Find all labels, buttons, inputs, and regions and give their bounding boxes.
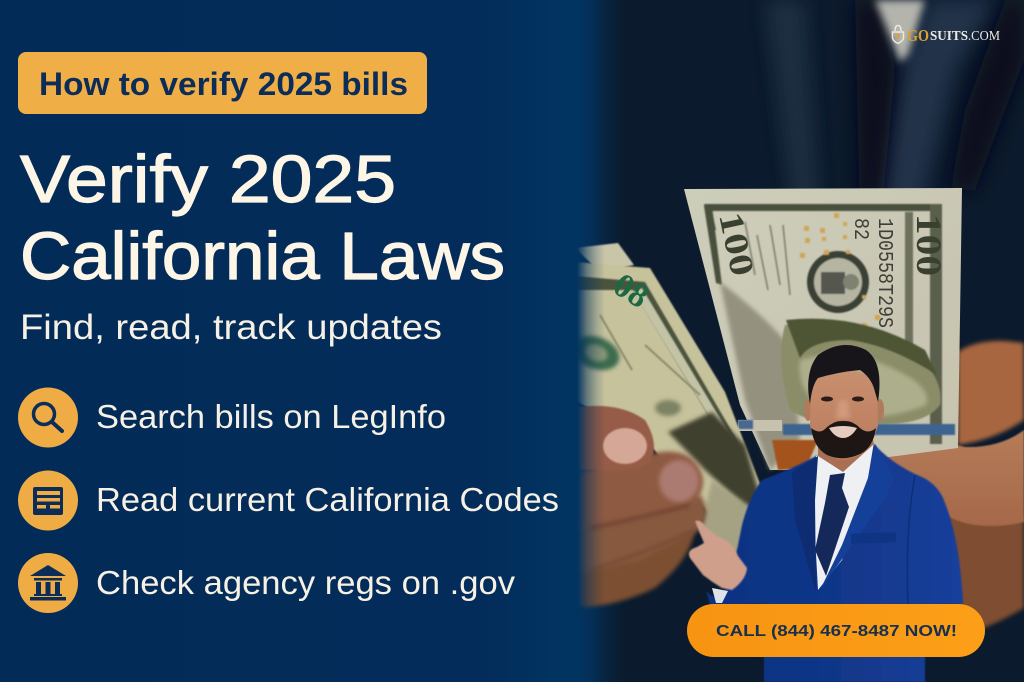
subtitle: Find, read, track updates [20,308,442,347]
left navy panel background [0,0,600,682]
ears [804,399,812,421]
left bill green numerals: 08 [607,266,655,316]
tie [815,473,849,576]
banknote 100 corners: 100 [909,214,949,276]
lower bill [700,480,762,560]
title: California Laws [20,219,505,294]
left bill seal [568,330,624,376]
thumb [578,406,654,470]
list item: read codes [18,470,559,530]
icon: government building [18,553,78,613]
right lapel [820,444,894,590]
fourth finger [578,530,695,607]
photo: right banknote: 82 [848,218,871,240]
banknote gold specks [800,213,880,340]
left panel gradient overlay [565,0,605,682]
eyes [821,396,833,402]
photo background: dark suit [570,0,1024,682]
list item: agency regs: Check agency regs on .gov [96,564,516,601]
thumb nail [603,428,647,464]
upper finger [958,341,1024,445]
thumb [872,430,1024,526]
icon: magnifying glass [18,388,78,448]
smile [829,426,857,438]
list item: search bills [18,388,446,448]
logo: GoSuits.com [892,26,1000,45]
left bill border band [575,276,738,448]
left lapel [792,456,818,592]
jacket [706,444,963,682]
man in blue suit [689,345,963,682]
finger nail [659,460,699,502]
left bill small text [600,315,700,395]
pocket [851,532,896,544]
sleeve seam [907,475,915,604]
call to action button [687,604,985,657]
photo: left hand fingers [578,406,706,607]
photo: right banknote [684,188,962,470]
pointing hand [689,521,747,590]
badge: how to verify 2025 bills: How to verify 2025 bills [39,66,408,102]
hair [808,345,880,404]
logo shield icon [892,26,904,44]
photo: left banknotes [568,243,770,560]
logo: GoSuits.com: .COM [968,29,1000,44]
neck [818,435,874,472]
orange patch [772,440,818,470]
banknote serial number: 1D0558T29S [872,218,895,328]
badge: how to verify 2025 bills [18,52,427,114]
banknote seal [807,251,869,313]
list item: read codes: Read current California Codes [96,481,559,518]
left bill dark fold [668,412,762,510]
photo: right banknote: 100 [711,209,761,279]
logo: GoSuits.com: GO [907,26,929,45]
title: Verify 2025 [20,142,396,217]
list item: agency regs [18,553,516,613]
icon: document [18,470,78,530]
palm [945,515,1024,630]
title [20,142,505,294]
logo: GoSuits.com: SUITS [930,29,968,44]
shirt [813,442,874,590]
banknote blue strip [783,424,955,435]
banknote small script [745,222,790,295]
banknote portrait [720,282,941,470]
call to action button: CALL (844) 467-8487 NOW! [716,623,957,640]
beard [811,421,876,458]
shirt cuff [712,588,728,603]
photo: right hand holding the bills [872,341,1024,630]
list item: search bills: Search bills on LegInfo [96,398,446,435]
head [810,370,878,460]
second finger [578,452,703,530]
third finger [578,495,706,575]
nose [836,400,850,418]
banknote border [704,204,942,444]
